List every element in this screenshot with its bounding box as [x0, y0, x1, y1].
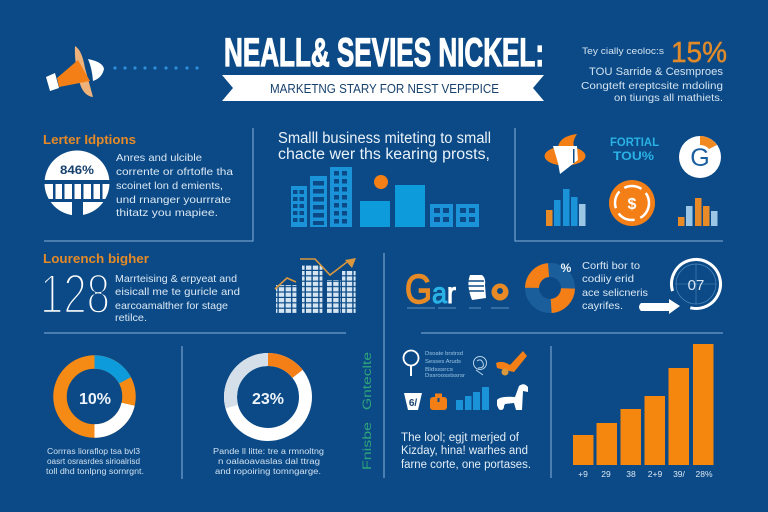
- bar chart: orange: 28%: [695, 469, 713, 479]
- vertical green label: Gnteclte: [360, 352, 374, 410]
- donut 3: %: [561, 261, 572, 275]
- panel: left insight: Lerter Idptions: [43, 132, 136, 147]
- icon: brain: [474, 356, 486, 375]
- tiny text: Dsoate brstrsd: [425, 351, 463, 357]
- icon: chat bubble: [544, 134, 586, 174]
- top-right stat: [581, 37, 727, 104]
- text block: Kizday, hina! warhes and: [401, 445, 528, 457]
- donut 1: 10%: [79, 391, 111, 408]
- panel: big number: Lourench bigher: [43, 251, 149, 266]
- vertical green label: [360, 352, 374, 470]
- icon: orange tool: [496, 351, 527, 376]
- caption 1: Corrras lioraflop tsa bvl3: [47, 447, 141, 456]
- dotted connector: [113, 66, 199, 70]
- bar chart: orange: 39/: [673, 469, 686, 479]
- icon: clock: [666, 254, 726, 314]
- text block: [582, 260, 648, 312]
- donut 2: 23%: [252, 391, 284, 408]
- bar chart: right: [678, 198, 718, 226]
- label: portal: TOU%: [613, 151, 654, 163]
- tiny text: [425, 351, 465, 379]
- icon: megaphone: [46, 46, 104, 97]
- icon: stack: [468, 275, 486, 308]
- text block: [401, 432, 531, 471]
- chart: grid bars with trend: [275, 258, 356, 313]
- caption 1: toll dhd tonlpng sornrgnt.: [46, 467, 144, 476]
- top-right stat: on tiungs all mathiets.: [614, 92, 723, 104]
- bar chart: orange: 29: [601, 469, 611, 479]
- icon: percent circle: [44, 150, 110, 216]
- donut 2: [230, 360, 306, 434]
- icon: G badge: [679, 136, 721, 178]
- label: portal: FORTIAL: [610, 137, 659, 149]
- text block: Anres and ulcible: [116, 152, 202, 164]
- panel border lines: [44, 128, 723, 479]
- caption 2: Pande ll litte: tre a rmnoltng: [213, 447, 324, 456]
- text block: [115, 273, 240, 324]
- panel: right icons: [544, 134, 721, 226]
- bar chart: orange: 38: [626, 469, 636, 479]
- top-right stat: Tey cially ceoloc:s: [582, 46, 664, 57]
- logo text: a: [432, 277, 447, 310]
- donut 3: [532, 261, 572, 306]
- title: NEALL& SEVIES NICKEL:: [224, 31, 544, 75]
- panel: big number: [40, 251, 356, 325]
- text block: [116, 152, 233, 219]
- bar chart: orange: 2+9: [648, 469, 662, 479]
- icon: cup: 6/: [409, 398, 417, 409]
- caption 1: [46, 447, 144, 476]
- panel: icon grid: [401, 350, 531, 471]
- text block: corrente or ofrtofle tha: [116, 166, 233, 178]
- text block: scoinet lon d emients,: [116, 180, 223, 192]
- tiny text: Bldsssrcs: [425, 367, 454, 373]
- bar chart: left: [546, 189, 586, 226]
- icon: buildings: [291, 167, 479, 227]
- icon: briefcase: [430, 394, 447, 410]
- panel: city chart: [278, 130, 491, 227]
- caption 2: [213, 447, 324, 476]
- donut 1: [60, 362, 129, 431]
- text block: eisicall me te guricle and: [115, 286, 240, 298]
- text block: ace selicneris: [582, 287, 648, 299]
- icon: magnifier: [404, 350, 418, 376]
- text block: earcoamalther for stage: [115, 300, 228, 312]
- text block: und rnanger yourrrate: [116, 194, 231, 206]
- subtitle ribbon: [222, 75, 544, 101]
- icon: white animal: [497, 384, 528, 410]
- text block: retilce.: [115, 312, 147, 324]
- icon: dollar coin: $: [628, 196, 637, 213]
- text block: codiiy erid: [582, 273, 634, 285]
- icon: dollar coin: [609, 180, 655, 226]
- text block: Corfti bor to: [582, 260, 640, 272]
- bar chart: orange: [573, 344, 714, 479]
- icon: G badge: G: [690, 144, 710, 172]
- logo text: [405, 266, 456, 312]
- logo text: G: [405, 266, 432, 312]
- icon: percent circle: 846%: [60, 163, 94, 177]
- panel: city chart: Smalll business miteting to small: [278, 130, 491, 147]
- bar chart: orange: +9: [578, 469, 588, 479]
- text block: farne corte, one portases.: [401, 459, 531, 471]
- text block: cayrifes.: [582, 300, 623, 312]
- text block: Marrteising & erpyeat and: [115, 273, 237, 285]
- panel: brand row: [405, 254, 726, 314]
- tiny text: Sesses Aruds: [425, 359, 462, 365]
- arrow: [639, 299, 680, 314]
- caption 2: n oalaoavaslas dal ttrag: [218, 457, 320, 466]
- tiny text: Dssroosstssrsr: [425, 373, 465, 379]
- subtitle ribbon: MARKETNG STARY FOR NEST VEPFPICE: [270, 81, 499, 96]
- caption 2: and ropoiring tomngarge.: [215, 467, 321, 476]
- logo text: r: [447, 277, 456, 310]
- top-right stat: Congteft ereptcsite mdoling: [581, 80, 723, 92]
- stat: 128: 128: [40, 262, 110, 325]
- text block: The lool; egjt merjed of: [401, 432, 520, 444]
- label: portal: [610, 137, 659, 163]
- panel: left insight: [43, 132, 233, 219]
- top-right stat: 15%: [671, 37, 727, 69]
- caption 1: oasrt osrasrdes sirioalrisd: [47, 457, 140, 466]
- icon: orange circle: [491, 284, 509, 308]
- icon: clock: 07: [688, 277, 704, 294]
- vertical green label: Fnisbe: [360, 422, 374, 470]
- bar chart: small: [456, 387, 489, 410]
- text block: thitatz you mapiee.: [116, 207, 218, 219]
- top-right stat: TOU Sarride & Cesmproes: [589, 66, 724, 78]
- panel: city chart: chacte wer ths kearing prosts,: [278, 146, 490, 163]
